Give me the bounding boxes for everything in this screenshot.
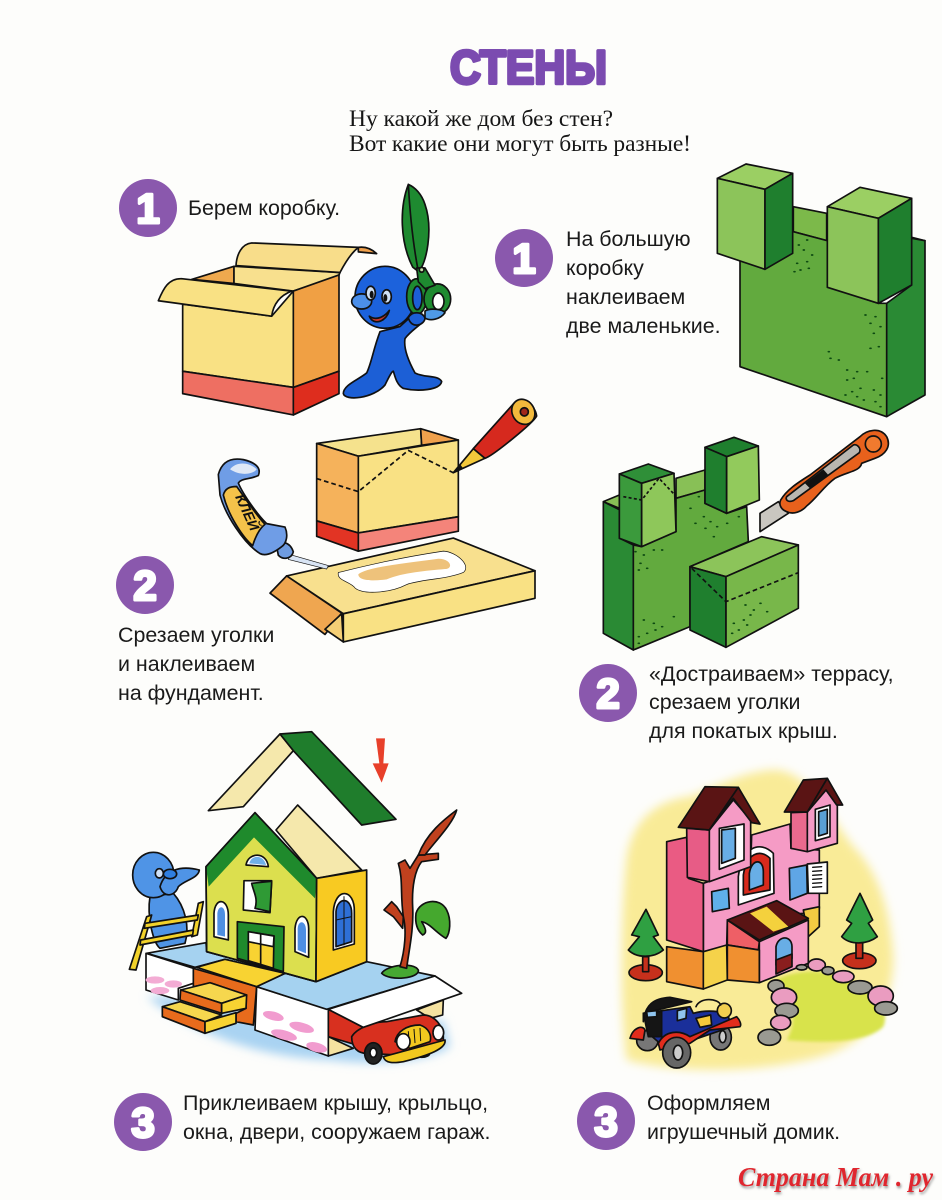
badge: right step 3 [577,1092,635,1150]
badge: left step 3: 3 [131,1099,155,1146]
badge: left step 1 [119,179,177,237]
intro text: Ну какой же дом без стен? [349,106,613,132]
pine left [628,909,663,981]
green box with two small boxes [717,164,925,417]
text: right step 1: две маленькие. [566,314,721,338]
house body [667,824,819,989]
text: right step 2: для покатых крыш. [649,719,838,743]
platform and garage [146,943,443,1056]
yellow watercolor backdrop [622,770,893,1070]
text: right step 2 [649,662,894,743]
text: right step 3: игрушечный домик. [647,1120,840,1144]
foundation box with glue [270,538,535,642]
watermark: Страна Мам . ру [738,1162,934,1192]
text: right step 3 [647,1091,840,1144]
garage car [352,1015,445,1064]
text: left step 2 [118,623,274,705]
text: right step 2: срезаем уголки [649,690,801,714]
upper tower right [784,778,843,852]
badge: left step 2: 2 [133,562,157,609]
illustration: open box, character, glue and foundation [158,184,540,642]
illustration: green walls and knife [603,164,925,650]
text: left step 1: Берем коробку. [188,196,340,220]
house [206,805,367,982]
icon: glue tube: КЛЕЙ [231,491,264,534]
text: right step 1 [566,227,721,338]
illustration: finished pink toy house [622,770,897,1070]
watercolor shadow [147,997,450,1063]
icon: glue tube [218,459,328,569]
upper tower left [678,787,760,882]
box with cut lines [317,429,458,551]
badge: left step 3 [114,1093,172,1151]
intro text: Вот какие они могут быть разные! [349,131,691,157]
badge: right step 1 [495,229,553,287]
text: left step 2: и наклеиваем [118,652,255,676]
text: right step 2: «Достраиваем» террасу, [649,662,894,686]
text: left step 3 [183,1091,490,1144]
stone path [758,959,897,1045]
arrow: down [373,738,389,783]
text: right step 1: коробку [566,256,644,280]
porch [727,901,808,983]
icon: utility knife [760,430,888,532]
badge: left step 2 [116,556,174,614]
text: right step 1: На большую [566,227,690,251]
small tree [382,810,457,978]
pine right [842,893,877,969]
icon: pencil [453,395,540,473]
badge: right step 2: 2 [596,670,620,717]
roof pieces [208,732,396,825]
badge: right step 2 [579,664,637,722]
intro text [349,106,691,157]
text: left step 2: Срезаем уголки [118,623,274,647]
text: right step 3: Оформляем [647,1091,770,1115]
scissors handles [407,267,451,314]
text: left step 2: на фундамент. [118,681,264,705]
toy car [630,997,741,1068]
text: left step 3: окна, двери, сооружаем гараж. [183,1120,490,1144]
green terrace assembly [603,437,798,650]
badge: left step 1: 1 [136,185,160,232]
character on ladder [129,852,203,970]
open box [158,243,377,415]
badge: right step 1: 1 [512,235,536,282]
text: left step 3: Приклеиваем крышу, крыльцо, [183,1091,488,1115]
badge: right step 3: 3 [594,1098,618,1145]
text: right step 1: наклеиваем [566,285,685,309]
title: СТЕНЫ [450,40,607,94]
windows [712,847,827,912]
illustration: yellow-green house being assembled [129,732,462,1064]
character with scissors [343,184,451,398]
lime lawn [770,972,885,1042]
